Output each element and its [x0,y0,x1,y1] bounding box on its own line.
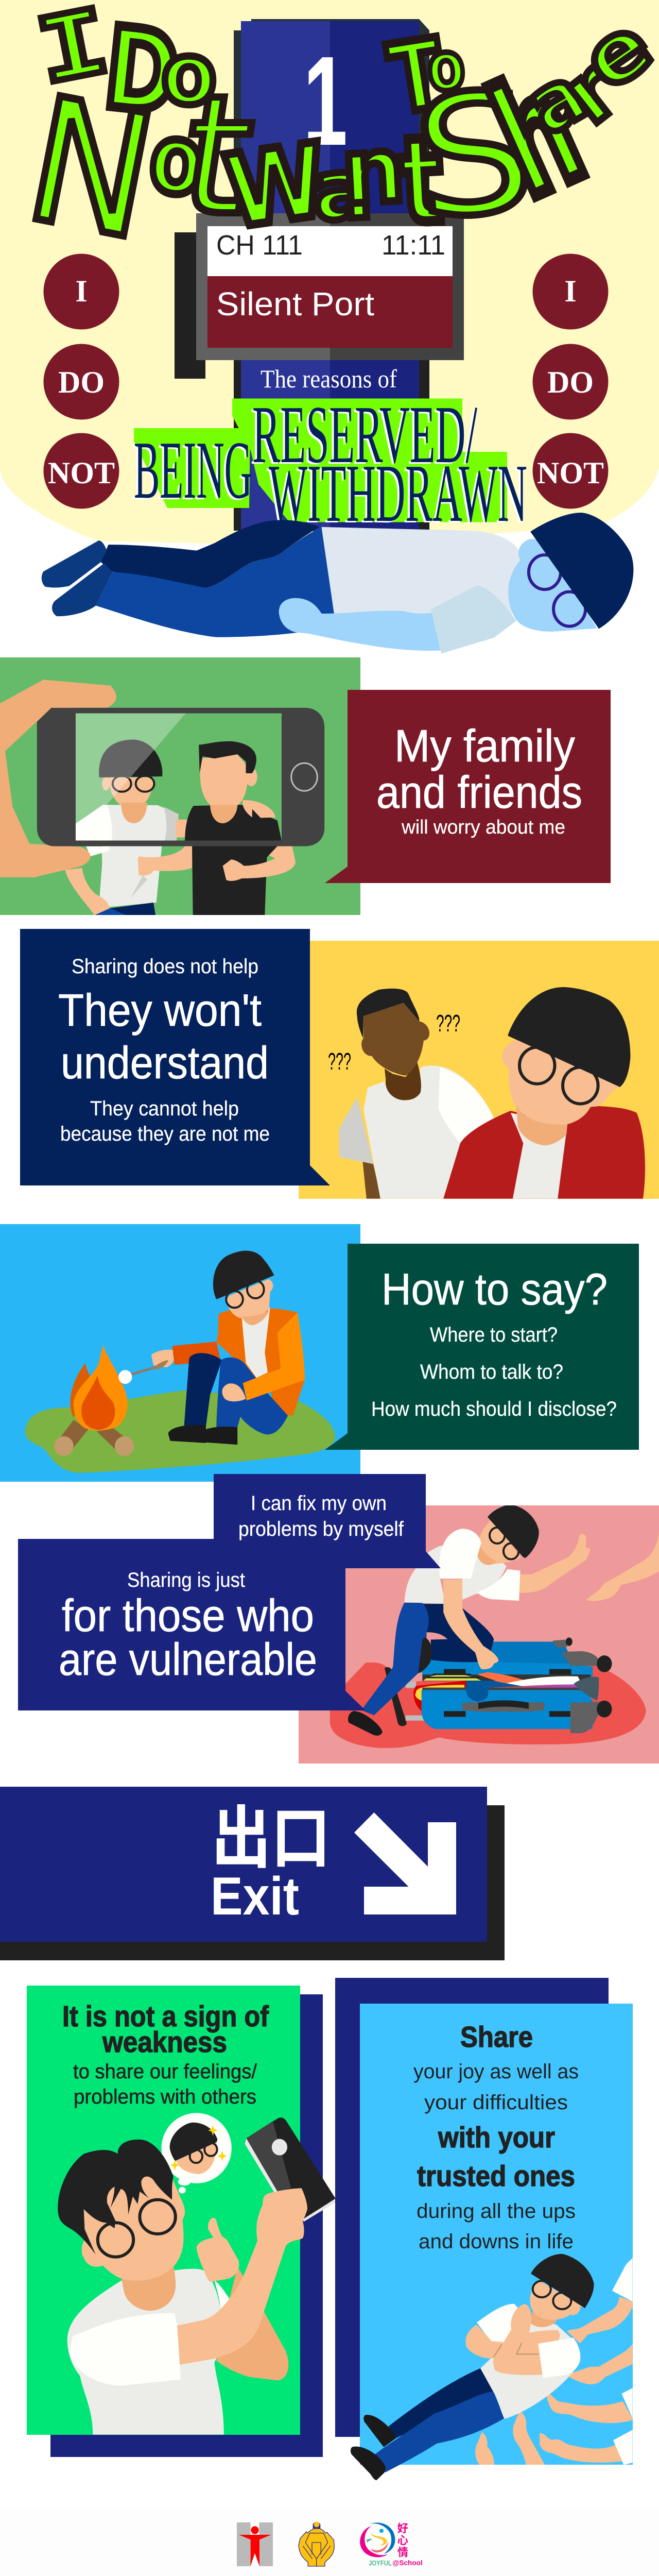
left circles: I DO NOT [43,253,119,509]
panel: not a sign of weakness [27,1986,336,2457]
TV channel screen [175,213,464,379]
title: I Do Not Want To Share [13,0,659,279]
callout: my family and friends: My family [394,720,575,771]
callout: sharing is just for those who are vulnerable: are vulnerable [59,1634,317,1685]
page background footer tint [0,2508,659,2576]
right circles: I DO NOT: DO [547,365,594,399]
title: I Do Not Want To Share: o [162,24,216,124]
right circles: I DO NOT [532,253,609,509]
illustration: selfie thumbs up [58,2113,336,2435]
subtitle: being reserved / withdrawn [132,388,527,540]
title: I Do Not Want To Share: D [99,3,185,139]
panel: blue campfire image [0,1224,360,1482]
text block: Share [460,2021,533,2054]
title: I Do Not Want To Share: a [310,141,374,240]
illustration: person falling back [351,2254,594,2480]
panel: not a sign of weakness: to share our feelings/ [73,2060,257,2083]
arrow [354,1812,456,1914]
left circles: I DO NOT: NOT [48,456,115,490]
left circles: I DO NOT: I [75,274,88,308]
panel: not a sign of weakness: weakness [102,2026,227,2059]
exit label chinese: 出口 [212,1801,331,1876]
callout: how to say [325,1244,639,1450]
logo: red figure [237,2522,273,2566]
sign post [234,19,429,531]
subtitle: being reserved / withdrawn: BEING [132,426,250,517]
title: I Do Not Want To Share: W [218,121,333,251]
callout: they won't understand: understand [61,1037,269,1088]
channel name: Silent Port [216,285,374,323]
logo: hands holding figure [299,2522,334,2566]
logo: joyful at school: @School [392,2558,423,2567]
left circles: I DO NOT: DO [58,365,105,399]
title: I Do Not Want To Share: t [397,110,446,251]
title: I Do Not Want To Share: N [13,60,169,279]
callout: sharing is just for those who are vulnerable: for those who [62,1590,314,1641]
panel: not a sign of weakness: problems with others [74,2086,256,2108]
title: I Do Not Want To Share: T [382,18,451,135]
logo: joyful at school: 心 [397,2534,408,2547]
callout: I can fix my own problems [214,1474,441,1568]
callout: sharing is just for those who are vulnerable [18,1539,366,1710]
panel: yellow two people image [299,941,659,1199]
question marks: ??? [436,1010,460,1037]
callout: how to say: How much should I disclose? [371,1398,617,1420]
callout: how to say: How to say? [381,1265,608,1314]
callout: my family and friends: will worry about me [401,817,565,838]
callout: how to say: Where to start? [430,1324,558,1346]
hand holding phone [0,680,116,877]
title: I Do Not Want To Share: o [146,103,208,217]
callout: how to say: Whom to talk to? [420,1361,563,1383]
big number 1: 1 [303,30,348,172]
subtitle: being reserved / withdrawn: BEING [134,424,252,516]
logo: joyful at school: 好 [397,2522,408,2535]
title: I Do Not Want To Share: a [511,49,601,152]
right circles: I DO NOT: NOT [537,456,604,490]
title: I Do Not Want To Share: o [424,26,468,107]
logo: joyful at school: JOYFUL [369,2558,392,2567]
callout: they won't understand: Sharing does not help [72,955,258,978]
title: I Do Not Want To Share: h [469,40,606,232]
panel: share with trusted ones: during all the ups [417,2200,576,2223]
panel: cream header background [0,0,659,546]
callout: they won't understand: because they are not me [60,1123,270,1145]
callout: I can fix my own problems: problems by myself [238,1518,404,1540]
panel: yellow two people image: ??? [328,1048,351,1075]
title: I Do Not Want To Share: S [407,55,541,257]
phone [37,708,324,846]
panel: share with trusted ones: with your [438,2121,555,2154]
heading: It is not a sign of [62,2000,269,2033]
right circles: I DO NOT: I [564,274,577,308]
illustration: supporting hands [475,2258,633,2465]
panel: share with trusted ones: and downs in life [419,2230,574,2253]
callout: they won't understand: They cannot help [90,1097,239,1120]
exit label english: Exit [211,1867,299,1926]
title: I Do Not Want To Share: t [170,60,265,252]
callout: sharing is just for those who are vulnerable: Sharing is just [127,1569,245,1591]
panel: pink suitcase image [299,1504,659,1764]
panel: share with trusted ones: trusted ones [417,2160,575,2193]
exit sign [0,1787,505,1960]
panel: share with trusted ones: your difficulties [424,2091,568,2114]
text: The reasons of: The reasons of [261,364,397,393]
panel: green selfie image [0,657,360,915]
title: I Do Not Want To Share: n [339,117,407,225]
callout: they won't understand: They won't [58,985,262,1036]
title: I Do Not Want To Share: r [544,41,636,142]
logo: joyful at school [360,2522,423,2567]
callout: my family and friends [325,690,611,883]
callout: my family and friends: and friends [376,767,582,818]
panel: share with trusted ones [335,1978,633,2480]
callout: they won't understand [20,929,330,1185]
illustration: person lying down [42,513,633,654]
panel: share with trusted ones: your joy as well as [413,2060,579,2083]
logo: joyful at school: 情 [397,2547,408,2559]
clock: 11:11 [381,230,445,261]
callout: I can fix my own problems: I can fix my own [251,1492,387,1515]
channel number: CH 111 [216,230,303,261]
